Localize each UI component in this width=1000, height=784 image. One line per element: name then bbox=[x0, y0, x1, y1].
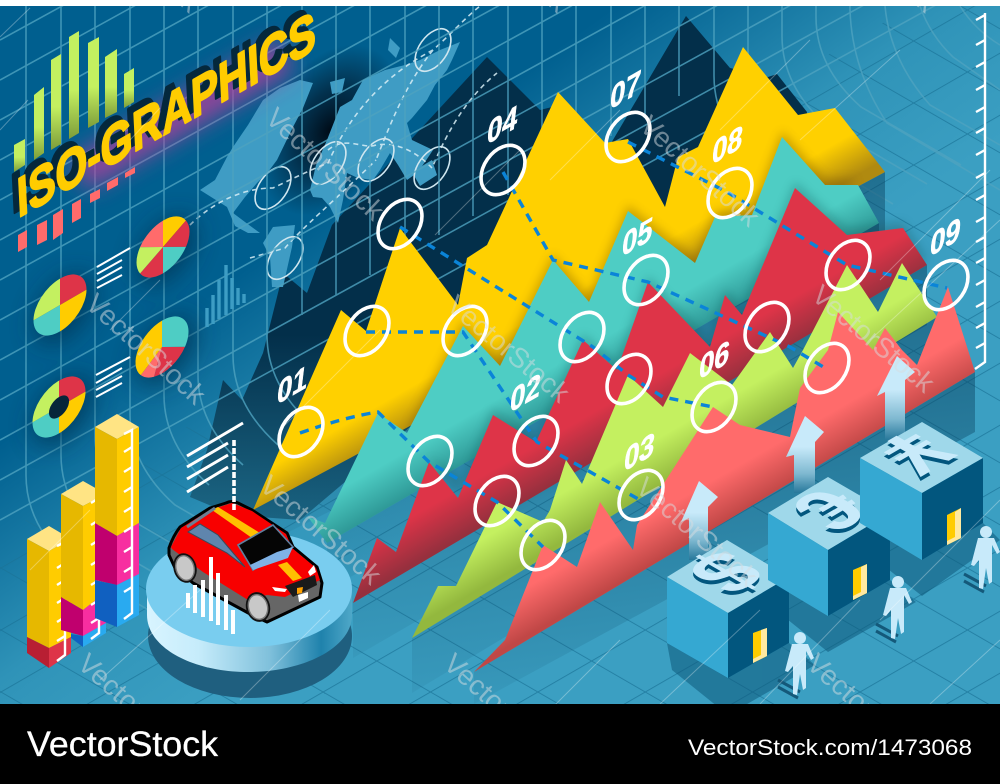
cube: yen: ¥ bbox=[857, 419, 974, 486]
number labels: 04 bbox=[485, 96, 521, 152]
footer logo: VectorStock bbox=[27, 724, 218, 764]
title glow bbox=[80, 55, 285, 175]
car legend lines bbox=[187, 423, 243, 492]
dashed link lines bbox=[300, 142, 947, 547]
shadow on yellow bbox=[407, 131, 858, 430]
number labels: 02 bbox=[508, 365, 543, 420]
stacked column 3 bbox=[95, 414, 139, 627]
cube: yen bbox=[857, 419, 983, 560]
watermarks: VectorStock bbox=[441, 289, 576, 409]
cube shadows on floor bbox=[667, 523, 1000, 715]
watermarks: VectorStock bbox=[72, 647, 205, 771]
number labels bbox=[275, 62, 963, 479]
salmon area layer bbox=[474, 287, 975, 672]
donut chart bbox=[32, 376, 86, 438]
cube: euro bbox=[768, 476, 890, 616]
dark mountain silhouettes bbox=[190, 16, 807, 520]
pie chart: four sectors bbox=[34, 274, 86, 336]
shadow on teal bbox=[429, 182, 927, 510]
footer bar bbox=[0, 704, 1000, 784]
cube: dollar: $ bbox=[669, 539, 785, 606]
title: ISO-GRAPHICS bbox=[16, 0, 317, 230]
world map bbox=[190, 6, 497, 287]
arrow: euro bbox=[786, 416, 824, 493]
red area layer bbox=[353, 188, 927, 603]
footer image id: VectorStock.com/1473068 bbox=[688, 735, 972, 760]
title: ISO-GRAPHICS bbox=[10, 0, 311, 226]
car bbox=[169, 502, 322, 625]
watermarks: VectorStock bbox=[630, 471, 764, 593]
white mini bars on platform bbox=[188, 557, 233, 634]
watermarks: VectorStock bbox=[801, 647, 934, 771]
pie chart shadows bbox=[33, 204, 196, 458]
cube: dollar: $ bbox=[669, 543, 785, 610]
watermarks: VectorStock bbox=[260, 102, 391, 227]
cube: yen: ¥ bbox=[857, 423, 974, 490]
floor shadows of chart layers bbox=[253, 172, 975, 704]
watermarks: VectorStock bbox=[806, 279, 941, 399]
person 1 bbox=[778, 632, 814, 698]
number labels: 05 bbox=[620, 209, 655, 264]
cube: dollar bbox=[667, 539, 789, 678]
legend lines upper bbox=[97, 248, 130, 288]
pie chart: six sectors bbox=[136, 216, 190, 278]
yellow area layer bbox=[253, 47, 885, 510]
teal area layer bbox=[308, 137, 879, 543]
watermarks: VectorStock bbox=[634, 109, 767, 233]
watermarks: VectorStock bbox=[80, 287, 213, 411]
arrow: yen bbox=[877, 356, 915, 440]
person 2 bbox=[876, 576, 912, 642]
number labels: 03 bbox=[622, 424, 657, 479]
stacked column 2 bbox=[61, 481, 106, 647]
legend lines lower bbox=[96, 357, 130, 397]
car pin dashed line bbox=[232, 440, 236, 512]
number labels: 07 bbox=[608, 62, 643, 117]
arrow: dollar bbox=[681, 481, 718, 560]
number labels: 08 bbox=[710, 117, 745, 172]
green area layer bbox=[412, 263, 937, 638]
watermarks: VectorStock bbox=[254, 469, 388, 591]
right ruler bbox=[975, 13, 985, 369]
platform bbox=[146, 531, 352, 698]
red dashes under title bbox=[18, 167, 135, 252]
cube: euro: € bbox=[773, 480, 889, 547]
person 3 bbox=[964, 526, 1000, 592]
number labels: 06 bbox=[697, 332, 732, 387]
data point rings bbox=[270, 104, 977, 578]
pie chart: mixed sectors bbox=[136, 316, 188, 378]
cube: euro: € bbox=[773, 476, 889, 543]
number labels: 01 bbox=[275, 357, 310, 412]
green bars bbox=[14, 31, 134, 172]
stacked column 1 bbox=[27, 526, 71, 668]
mini blue bar chart bbox=[207, 265, 244, 327]
number labels: 09 bbox=[928, 209, 963, 264]
watermarks: VectorStock bbox=[438, 647, 571, 771]
